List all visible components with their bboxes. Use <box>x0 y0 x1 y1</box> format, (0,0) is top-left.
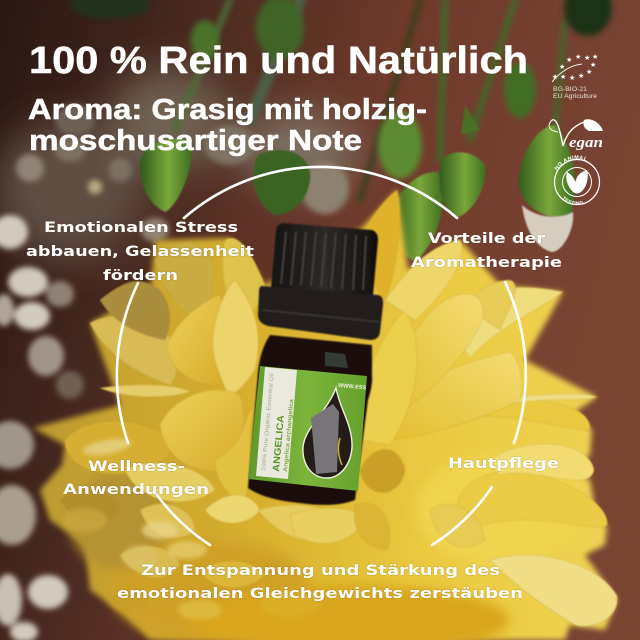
badge: EU organic: EU Agriculture <box>553 93 597 100</box>
subtitle: aroma: moschusartiger Note <box>29 125 362 157</box>
label: wellness: Anwendungen <box>63 482 209 498</box>
bottle label <box>248 366 367 491</box>
badge: EU organic: ★ <box>575 53 581 61</box>
background: blurred white blossoms <box>0 70 360 640</box>
flower: petals <box>60 190 617 626</box>
label: stress: Emotionalen Stress <box>44 220 238 236</box>
badge: EU organic: ★ <box>592 53 598 61</box>
subtitle: aroma <box>28 94 427 157</box>
badge: no animal testing <box>554 155 600 206</box>
label: wellness <box>63 459 209 498</box>
background: green stems and buds <box>70 0 612 262</box>
label: atomise: emotionalen Gleichgewichts zerstäuben <box>117 586 523 602</box>
label: aromatherapy <box>411 231 562 271</box>
badge: EU organic: ★ <box>552 73 558 81</box>
white label strip <box>256 367 297 479</box>
subtitle: aroma: Aroma: Grasig mit holzig- <box>28 94 427 126</box>
flower: ruffled lower-left highlights <box>63 436 320 620</box>
label: stress: fördern <box>103 268 178 284</box>
badge: EU organic: ★ <box>559 63 565 71</box>
label: atomise <box>117 563 523 602</box>
badge: EU organic: ★ <box>578 72 584 80</box>
product names: 100% Pure Organic Essential Oil <box>261 373 276 471</box>
badge: vegan <box>549 119 603 151</box>
badge: EU organic: ★ <box>590 61 596 69</box>
product names: Angelica archangelica <box>283 398 295 472</box>
label: aromatherapy: Vorteile der <box>428 231 546 247</box>
badge: EU organic: ★ <box>586 68 592 76</box>
flower: base bloom <box>33 190 617 640</box>
bottle cap <box>258 223 383 340</box>
product names <box>261 373 295 472</box>
circle arcs <box>117 167 526 545</box>
badge: no animal testing: TESTING <box>563 196 583 205</box>
badge: no animal testing: NO ANIMAL <box>554 155 586 170</box>
label: wellness: Wellness- <box>88 459 185 475</box>
bottle body <box>248 335 372 505</box>
label: stress <box>26 220 254 284</box>
label: aromatherapy: Aromatherapie <box>411 255 562 271</box>
badge: vegan: egan <box>569 135 603 151</box>
label: stress: abbauen, Gelassenheit <box>26 244 254 260</box>
badge: EU organic: BG-BIO-21 <box>553 86 587 93</box>
badge: EU organic: ★ <box>560 73 566 81</box>
title: 100 % Rein und Natürlich <box>29 40 528 82</box>
product names: ANGELICA <box>271 414 287 472</box>
label: atomise: Zur Entspannung und Stärkung des <box>141 563 500 579</box>
website: www.ess <box>337 380 367 391</box>
drop emblem <box>303 388 352 478</box>
badge: EU organic: ★ <box>566 56 572 64</box>
badge: EU organic <box>552 53 598 100</box>
bottle <box>248 223 383 505</box>
bottle glass highlight <box>325 352 348 368</box>
badge: EU organic: ★ <box>569 74 575 82</box>
badge: EU organic: ★ <box>584 54 590 62</box>
label: skin care: Hautpflege <box>448 456 559 472</box>
